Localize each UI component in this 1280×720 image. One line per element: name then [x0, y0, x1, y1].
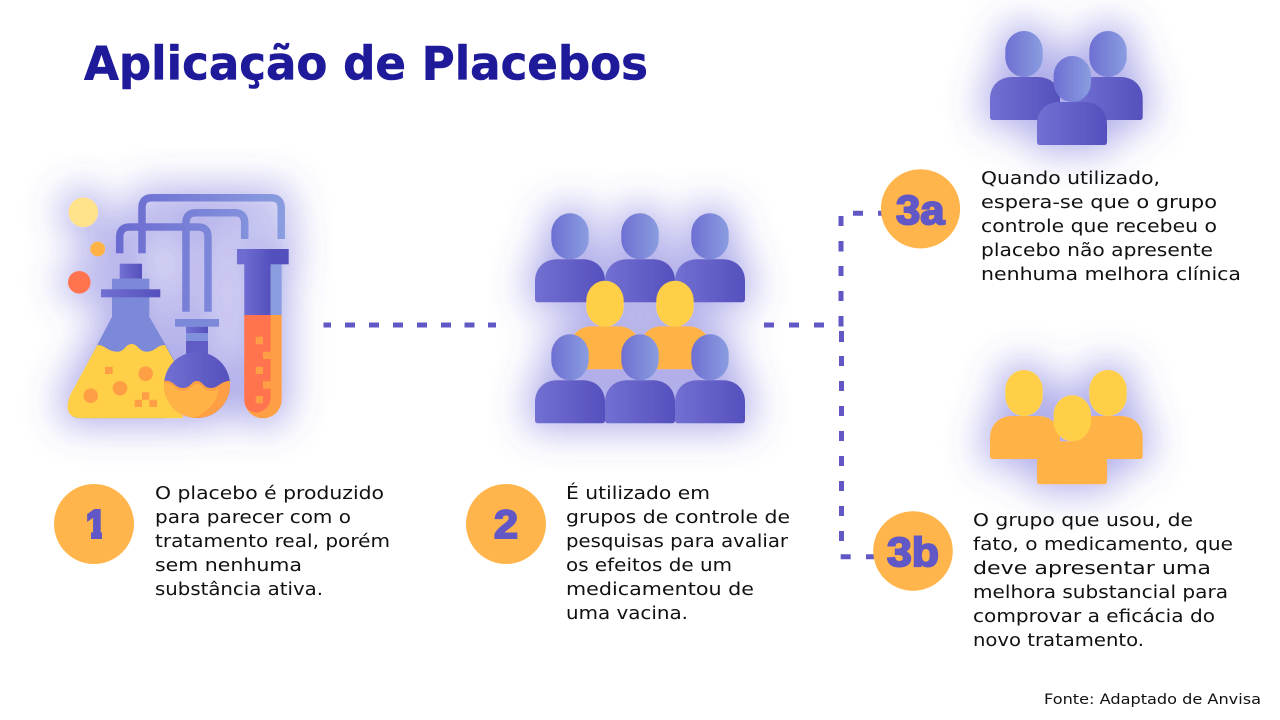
text: step 3b: comprovar a eficácia do	[973, 607, 1215, 627]
icon: mixed group of people	[535, 213, 745, 423]
text: step 3a: Quando utilizado,	[981, 169, 1160, 189]
badge 3b: 3b	[887, 529, 939, 575]
badge 2	[466, 484, 546, 564]
text: step 3a: espera-se que o grupo	[981, 193, 1217, 213]
badge 3a	[881, 169, 960, 248]
front row	[535, 334, 745, 423]
connector: step 1 to step 2	[324, 322, 496, 328]
text: step 3b: deve apresentar uma	[973, 559, 1211, 579]
step 1	[54, 484, 396, 600]
back row	[535, 213, 745, 302]
text: step 2: É utilizado em	[566, 482, 710, 504]
badge 2: 2	[494, 503, 518, 547]
step 2	[466, 482, 796, 624]
text: step 3b: fato, o medicamento, que	[973, 535, 1233, 555]
text: step 2: grupos de controle de	[566, 508, 790, 528]
badge 1: 1	[86, 503, 106, 547]
text: step 1: substância ativa.	[155, 580, 323, 600]
test tube	[237, 249, 289, 418]
step 3a	[881, 169, 1241, 285]
text: step 1: O placebo é produzido	[155, 484, 384, 504]
large flask	[68, 264, 183, 418]
icon: placebo group	[990, 31, 1143, 145]
text: step 3a: controle que recebeu o	[981, 217, 1217, 237]
glass pipes	[120, 198, 281, 312]
text: step 2: os efeitos de um	[566, 556, 732, 576]
text: step 1: tratamento real, porém	[155, 532, 390, 552]
badge 3b	[873, 511, 953, 591]
text: step 3a: placebo não apresente	[981, 241, 1213, 261]
badge 1	[54, 484, 134, 564]
text: step 3a: nenhuma melhora clínica	[981, 265, 1241, 285]
middle row: yellow people	[570, 281, 710, 369]
text: step 1: sem nenhuma	[155, 556, 302, 576]
text: step 3b: O grupo que usou, de	[973, 511, 1193, 531]
step 3b	[873, 511, 1239, 651]
text: step 3b: novo tratamento.	[973, 631, 1144, 651]
text: step 2: pesquisas para avaliar	[566, 532, 789, 552]
source note: Fonte: Adaptado de Anvisa	[1044, 692, 1261, 708]
text: step 3b: melhora substancial para	[973, 583, 1228, 603]
icon: treated group	[990, 370, 1143, 484]
badge 3a: 3a	[896, 187, 946, 233]
text: step 2: uma vacina.	[566, 604, 688, 624]
icon: laboratory flasks and test tube	[68, 198, 289, 420]
title: Aplicação de Placebos	[84, 36, 648, 90]
text: step 1: para parecer com o	[155, 508, 351, 528]
bubbles	[68, 198, 105, 294]
round flask	[160, 319, 232, 420]
text: step 2: medicamentou de	[566, 580, 754, 600]
connector: step 2 to branches	[764, 213, 884, 557]
